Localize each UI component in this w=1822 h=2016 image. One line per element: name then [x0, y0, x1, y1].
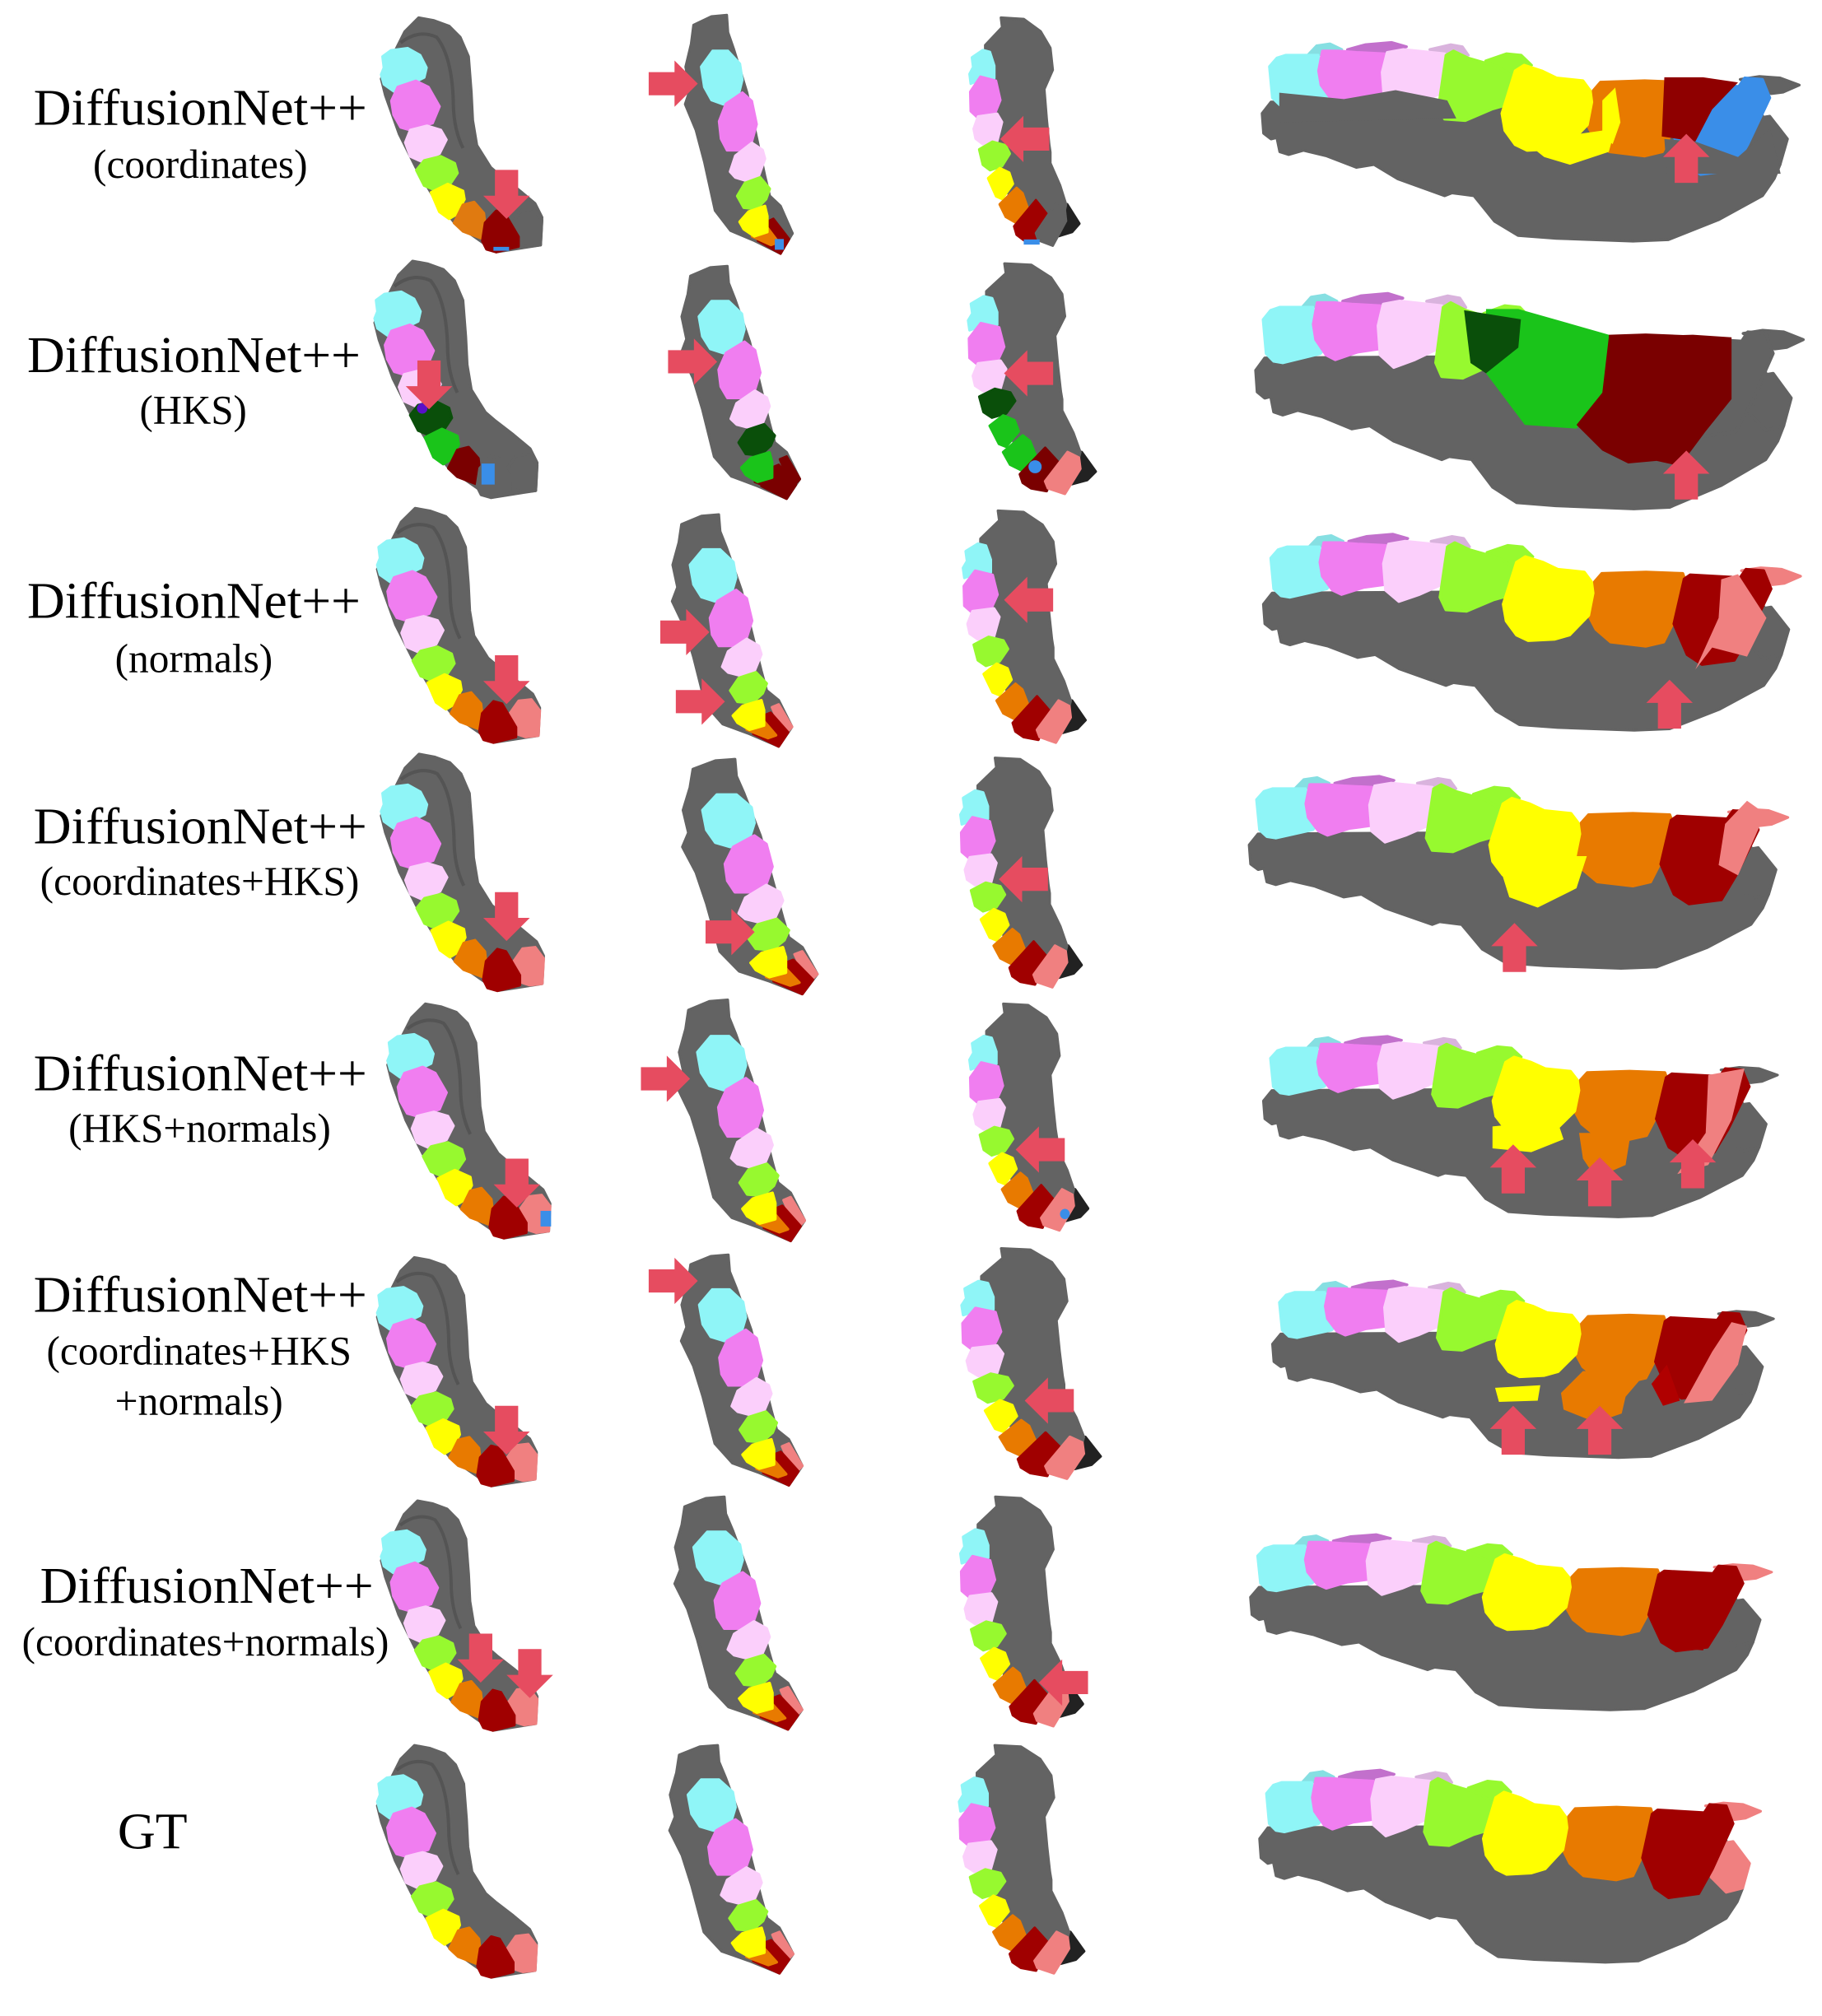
row 6 view 2 — [681, 1255, 802, 1485]
row 1: DiffusionNet++ (coordinates) — [34, 15, 1799, 254]
row 3 view 2 — [672, 514, 792, 747]
row 6: DiffusionNet++ (coordinates+HKS+normals) — [34, 1249, 1773, 1486]
row 2: DiffusionNet++ (HKS) — [27, 261, 1803, 509]
row 2 arrows — [406, 338, 1709, 500]
row 4 view 1 — [381, 754, 543, 990]
row 2 view 2 — [681, 266, 799, 499]
row 2 label: (HKS) — [140, 387, 247, 432]
row 4 label: (coordinates+HKS) — [40, 858, 359, 904]
row 7 view 2 — [675, 1497, 802, 1730]
row 3 arrows — [483, 577, 1693, 729]
row 8: GT — [118, 1745, 1760, 1977]
row 7 arrows — [458, 1634, 1088, 1706]
row 7 label — [22, 1557, 389, 1664]
row 2 view 4 — [1256, 294, 1803, 509]
row 4 view 3 — [961, 758, 1082, 987]
row 1 view 3 — [970, 18, 1079, 245]
row 1 view 1 — [381, 18, 542, 252]
row 7 label: (coordinates+normals) — [22, 1618, 389, 1664]
row 8 view 4 — [1260, 1770, 1760, 1962]
row 5 label: (HKS+normals) — [68, 1105, 331, 1151]
row 4 label: DiffusionNet++ — [34, 797, 367, 854]
row 7: DiffusionNet++ (coordinates+normals) — [22, 1497, 1772, 1730]
row 6 label: DiffusionNet++ — [34, 1266, 367, 1324]
row 4: DiffusionNet++ (coordinates+HKS) — [34, 754, 1787, 994]
row 2 label: DiffusionNet++ — [27, 326, 361, 384]
row 3 view 1 — [377, 508, 540, 743]
row 5 view 4 — [1264, 1036, 1778, 1217]
row 8 view 1 — [377, 1745, 537, 1977]
row 2 label — [27, 326, 361, 432]
row 3 view 4 — [1264, 534, 1801, 730]
row 7 label: DiffusionNet++ — [40, 1557, 374, 1614]
row 2 view 3 — [968, 263, 1096, 494]
row 8 view 2 — [669, 1745, 793, 1973]
row 5 arrows — [494, 1055, 1716, 1208]
row 3: DiffusionNet++ (normals) — [27, 508, 1801, 747]
row 1 view 2 — [685, 15, 793, 254]
row 6 view 3 — [962, 1249, 1101, 1478]
row 8 view 3 — [959, 1745, 1084, 1973]
row 1 label: DiffusionNet++ — [34, 79, 367, 137]
row 4 label — [34, 797, 367, 904]
row 2 view 1 — [375, 261, 537, 498]
row 6 label: (coordinates+HKS — [47, 1328, 352, 1374]
row 5: DiffusionNet++ (HKS+normals) — [34, 1000, 1778, 1241]
row 4 view 2 — [683, 759, 818, 994]
row 5 view 2 — [678, 1000, 804, 1241]
row 1 label — [34, 79, 367, 187]
row 7 view 3 — [961, 1497, 1083, 1726]
row 7 view 4 — [1251, 1534, 1772, 1710]
row 6 view 1 — [377, 1258, 537, 1486]
row 4 arrows — [483, 856, 1538, 972]
row 3 label — [27, 572, 361, 681]
row 7 view 1 — [381, 1501, 538, 1730]
row 5 view 3 — [970, 1003, 1088, 1231]
row 1 view 4 — [1262, 43, 1799, 241]
row 5 view 1 — [388, 1003, 551, 1238]
row 3 label: (normals) — [115, 635, 273, 681]
row 3 label: DiffusionNet++ — [27, 572, 361, 630]
row 5 label — [34, 1045, 367, 1151]
row 5 label: DiffusionNet++ — [34, 1045, 367, 1102]
row 6 label: +normals) — [115, 1378, 283, 1424]
row 6 label — [34, 1266, 367, 1424]
row 1 arrows — [483, 61, 1709, 219]
row 1 label: (coordinates) — [93, 141, 308, 187]
row 4 view 4 — [1249, 776, 1787, 968]
row 6 view 4 — [1273, 1281, 1773, 1458]
row 3 view 3 — [963, 511, 1085, 743]
row 6 arrows — [483, 1258, 1623, 1455]
row 8 label: GT — [118, 1803, 188, 1860]
